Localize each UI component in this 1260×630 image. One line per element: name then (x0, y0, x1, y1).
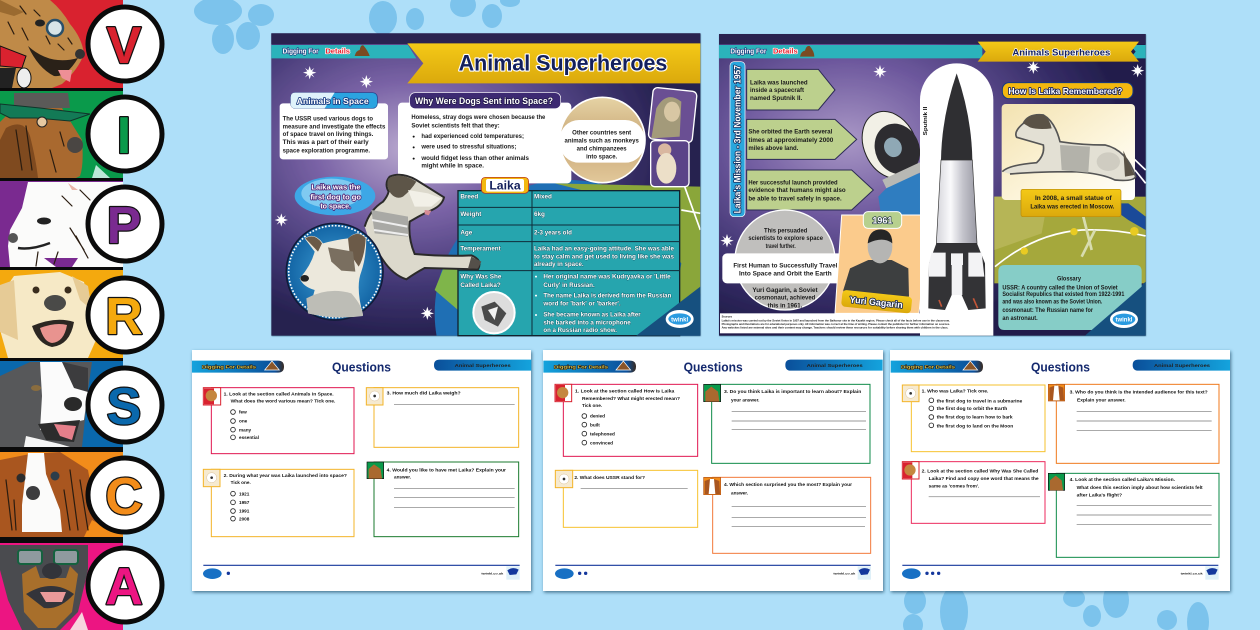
illustration: Sputnik II rocket: Sputnik II (923, 106, 929, 135)
callout: first dog in space (295, 177, 375, 215)
question 1 (902, 385, 1045, 452)
fact table: Laika: she barked into a microphone (543, 319, 631, 326)
title banner (407, 43, 700, 83)
panel: VIPERS dog strip (0, 0, 162, 630)
fact table: Laika: She became known as Laika after (543, 312, 641, 319)
question 4: 4. Look at the section called Laika's Mission. (1070, 477, 1175, 482)
worksheet header: Questions (1031, 361, 1090, 375)
small print box: Sources (722, 314, 733, 318)
header ribbon: Digging For Details: Digging For (283, 48, 319, 55)
fact table: Laika: Mixed (534, 194, 552, 201)
worksheet footer: twinkl.co.uk (833, 572, 856, 576)
glossary box (998, 265, 1142, 330)
question 2: Tick one. (231, 480, 251, 485)
question 4: 4. Which section surprised you the most? Explain your (724, 482, 852, 487)
fact table: Laika: Called Laika? (460, 282, 501, 289)
title banner (978, 42, 1139, 62)
card: Yuri Gagarin: 1961 (872, 215, 892, 225)
question 4: after Laika's flight? (1077, 492, 1122, 497)
arrow: orbited the Earth (747, 119, 857, 159)
small print box: Laika's mission was carried out by the Soviet Union in 1957 and launched from the Baikonur site in the Kazakh region. Please check all of the facts before use in the classroom. (722, 318, 950, 322)
question 1: essential (239, 435, 259, 440)
fact table: Laika: already in space. (534, 261, 584, 268)
corner triangle (1085, 282, 1146, 336)
worksheet header: Animal Superheroes (807, 363, 863, 369)
arrow: orbited the Earth: times at approximately 2000 (748, 137, 834, 144)
arrow: launched inside Sputnik II (747, 69, 835, 110)
band: I green with bloodhound (0, 91, 123, 178)
fact table: Laika: Age (460, 229, 473, 236)
question 3 (1048, 384, 1219, 463)
circle: scientists and Yuri Gagarin text: This persuaded (764, 227, 807, 234)
panel: Laika's Mission poster page 2 (719, 34, 1146, 336)
portrait medallion: Laika (286, 223, 383, 320)
text box: Why Were Dogs Sent into Space: Why Were Dogs Sent into Space? (415, 96, 553, 106)
timeline label: Laika's Mission (730, 62, 745, 217)
panel: worksheet page 3 (890, 350, 1230, 591)
letter circle S: S (107, 378, 141, 436)
question 3: 3. Do you think Laika is important to learn about? Explain (724, 389, 861, 394)
letter circle I: I (117, 107, 131, 165)
arrow: successful launch: be able to travel safely in space. (748, 195, 842, 202)
worksheet footer (203, 565, 520, 580)
letter circle R: R (105, 288, 143, 346)
callout: other countries: and chimpanzees (577, 146, 627, 153)
letter circle A (88, 548, 162, 622)
worksheet header: Animal Superheroes (455, 363, 511, 369)
question 3: 3. Who do you think is the intended audience for this text? (1070, 390, 1208, 395)
question 4 (1048, 473, 1219, 557)
text box: Animals in Space: space exploration programme. (283, 148, 370, 155)
text box: Animals in Space: The USSR used various dogs to (283, 116, 373, 123)
worksheet header (891, 360, 1230, 375)
text box: Animals in Space (280, 93, 388, 159)
text box: Why Were Dogs Sent into Space: might while in space. (421, 163, 484, 170)
text box: Why Were Dogs Sent into Space: would fidget less than other animals (420, 155, 529, 162)
fact table: Laika: 6kg (534, 211, 545, 218)
band: P purple with white dog (0, 181, 123, 267)
question 3: Explain your answer. (1077, 398, 1126, 403)
question 1: Remembered? What might erected mean? (582, 396, 680, 401)
question 2: 1957 (239, 500, 250, 505)
question 1 (203, 388, 354, 454)
heading: Laika: Laika (489, 180, 521, 193)
small print box: Photographs and illustrations are for educational purposes only. All information was correct at the time of writing. Please contact the publisher for further information on sources. (722, 322, 950, 326)
worksheet header: Questions (684, 361, 743, 375)
callout: other countries: into space. (586, 153, 617, 160)
question 1: 1. Who was Laika? Tick one. (922, 389, 988, 394)
worksheet footer (902, 565, 1219, 580)
question 2: 1921 (239, 491, 250, 496)
glossary box: cosmonaut: The Russian name for (1002, 307, 1093, 314)
question 4 (367, 462, 519, 537)
text box: Why Were Dogs Sent into Space: were used to stressful situations; (420, 144, 516, 151)
fact table: Laika: 2-3 years old (534, 229, 572, 236)
circle: scientists and Yuri Gagarin text: travel further. (766, 243, 796, 250)
question 4: answer. (731, 491, 748, 496)
circle: scientists and Yuri Gagarin text: First Human to Successfully Travel (733, 263, 838, 270)
question 2: 1991 (239, 509, 250, 514)
panel: worksheet page 2 (543, 350, 883, 591)
text box: Animals in Space: of space travel on living things. (283, 131, 374, 138)
circle: scientists and Yuri Gagarin text (722, 210, 848, 310)
small print box (720, 313, 952, 333)
circle: scientists and Yuri Gagarin text: scientists to explore space (748, 235, 823, 242)
title banner: Animals Superheroes (1012, 47, 1110, 57)
earth map and star trail (994, 157, 1146, 283)
question 2: Laika? Find and copy one word that means the (929, 476, 1039, 481)
caption: statue in Moscow: Laika was erected in Moscow. (1030, 203, 1115, 210)
glossary box: Socialist Republics that existed from 1922-1991 (1002, 291, 1125, 298)
header ribbon: Digging For Details: Details (325, 48, 350, 55)
header ribbon: Digging For Details (271, 45, 416, 58)
question 1: What does the word various mean? Tick one. (231, 399, 335, 404)
glossary box: Glossary (1057, 276, 1081, 283)
question 1: denied (590, 414, 605, 419)
arrow: launched inside Sputnik II: named Sputnik II. (750, 95, 803, 102)
worksheet header: Digging For Details (901, 364, 955, 370)
band: S blue with collie (0, 361, 123, 447)
circle: scientists and Yuri Gagarin text: Yuri Gagarin, a Soviet (752, 287, 819, 294)
monkey photos (648, 87, 697, 187)
text box: Why Were Dogs Sent into Space: Homeless, stray dogs were chosen because the (411, 114, 546, 121)
question 1: built (590, 422, 600, 427)
worksheet header: Digging For Details (202, 364, 256, 370)
band: A pink with rottweiler (0, 543, 123, 630)
fact table: Laika: Laika had an easy-going attitude. She was able (534, 246, 674, 253)
worksheet header (543, 360, 883, 375)
fact table: Laika: Breed (460, 194, 478, 201)
glossary box: and was also known as the Soviet Union. (1002, 299, 1103, 306)
question 3: 3. How much did Laika weigh? (387, 391, 461, 396)
question 1: 1. Look at the section called Animals in Space. (224, 391, 334, 396)
question 2: same as 'comes from'. (929, 483, 979, 488)
band: C orange with spaniel (0, 452, 123, 537)
panel: Animal Superheroes poster page 1 (270, 33, 702, 337)
illustration: Laika in harness (365, 175, 481, 279)
arrow: successful launch: evidence that humans might also (748, 187, 846, 194)
question 2: 2008 (239, 516, 250, 521)
question 1 (555, 384, 698, 456)
text box: Animals in Space: measure and investigate the effects (283, 124, 386, 131)
title banner: Animal Superheroes (459, 51, 667, 76)
text box: Why Were Dogs Sent into Space: Soviet scientists felt that they: (411, 122, 500, 129)
circle: scientists and Yuri Gagarin text: Into Space and Orbit the Earth (739, 271, 832, 278)
callout: first dog in space: Laika was the (311, 182, 361, 191)
letter circle P (88, 187, 162, 261)
fact table: Laika: on a Russian radio show. (543, 327, 617, 334)
fact table: Laika: Curly' in Russian. (543, 282, 595, 289)
worksheet footer: twinkl.co.uk (481, 572, 504, 576)
text box: Why Were Dogs Sent into Space: had experienced cold temperatures; (421, 133, 524, 140)
letter circle S (88, 368, 162, 442)
bottom-right corner and twinkl logo: twinkl (671, 317, 688, 323)
heading: Laika (481, 177, 529, 193)
letter circle P: P (107, 197, 141, 255)
fact table: Laika: Weight (460, 211, 482, 218)
callout: first dog in space: to space. (320, 201, 351, 210)
question 1: convinced (590, 440, 613, 445)
card: Yuri Gagarin (835, 212, 928, 314)
question 2: 2. What does USSR stand for? (574, 475, 645, 480)
letter circle V (88, 7, 162, 81)
illustration: Sputnik II rocket (920, 63, 993, 336)
question 3 (366, 388, 519, 447)
band: R yellow with retriever (0, 270, 123, 358)
arrow: launched inside Sputnik II: Laika was launched (750, 79, 808, 86)
heading: How Is Laika Remembered (1002, 83, 1133, 99)
band: V red with terrier (0, 0, 123, 88)
question 1: many (239, 427, 252, 432)
question 1: one (239, 419, 248, 424)
question 2: 2. Look at the section called Why Was She Called (922, 468, 1038, 473)
question 2 (203, 469, 354, 537)
letter circle C: C (105, 468, 143, 526)
arrow: orbited the Earth: She orbited the Earth several (748, 129, 833, 136)
question 3 (704, 384, 870, 463)
worksheet footer: twinkl.co.uk (1181, 572, 1203, 576)
glossary box: USSR: A country called the Union of Soviet (1002, 284, 1118, 291)
panel: worksheet page 1 (192, 350, 531, 591)
circle: scientists and Yuri Gagarin text: this in 1961. (768, 303, 803, 310)
fact table: Laika: Why Was She (460, 273, 502, 280)
letter circle V: V (107, 17, 142, 75)
letter circle R (88, 278, 162, 352)
letter circle I (88, 97, 162, 171)
callout: other countries: animals such as monkeys (564, 138, 639, 145)
arrow: launched inside Sputnik II: inside a spacecraft (750, 87, 805, 94)
heading: How Is Laika Remembered: How Is Laika Remembered? (1008, 86, 1122, 96)
text box: Animals in Space: Animals in Space (297, 96, 369, 106)
callout: other countries: Other countries sent (572, 129, 632, 136)
earth (434, 180, 700, 336)
question 1: telephoned (590, 431, 615, 436)
arrow: successful launch (747, 170, 873, 210)
fact table: Laika: to stay calm and get used to living like she was (534, 253, 674, 260)
worksheet header: Digging For Details (554, 364, 608, 370)
question 4: answer. (394, 474, 411, 479)
callout: other countries (560, 97, 645, 183)
bottom-right corner and twinkl logo (636, 287, 700, 336)
question 1: the first dog to land on the Moon (937, 423, 1013, 428)
earth (878, 173, 922, 220)
question 4: 4. Would you like to have met Laika? Explain your (387, 468, 506, 473)
text box: Why Were Dogs Sent into Space (398, 93, 571, 183)
glossary box: an astronaut. (1002, 315, 1038, 322)
twinkl logo (1110, 311, 1138, 328)
header ribbon: Details (773, 48, 798, 55)
fact table: Laika: The name Laika is derived from the Russian (543, 292, 671, 299)
question 2 (902, 462, 1045, 523)
fact table: Laika: word for 'bark' or 'barker'. (542, 301, 621, 308)
text box: Animals in Space: This was a part of their early (283, 139, 369, 146)
question 4: What does this section imply about how scientists felt (1077, 485, 1203, 490)
letter circle A: A (105, 558, 143, 616)
fact table: Laika: Temperament (460, 246, 502, 253)
caption: statue in Moscow (1021, 189, 1121, 217)
letter circle C (88, 458, 162, 532)
question 1: the first dog to travel in a submarine (937, 398, 1023, 403)
question 1: the first dog to orbit the Earth (937, 406, 1007, 411)
question 2 (555, 470, 698, 527)
header ribbon (719, 45, 1146, 58)
question 2: 2. During what year was Laika launched into space? (224, 473, 347, 478)
fact table: Laika (458, 191, 680, 336)
question 1: few (239, 410, 247, 415)
question 1: the first dog to learn how to bark (937, 415, 1013, 420)
twinkl logo: twinkl (1116, 318, 1133, 324)
small print box: Any websites listed are external sites and their content may change. Teachers should review these resources for suitability before sharing them with children in the class. (722, 326, 949, 330)
worksheet header: Questions (332, 361, 391, 375)
worksheet header (192, 360, 531, 375)
timeline label: Laika's Mission: Laika's Mission - 3rd November 1957 (732, 65, 742, 213)
worksheet footer (555, 565, 871, 580)
arrow: orbited the Earth: miles above land. (748, 145, 799, 152)
arrow: successful launch: Her successful launch provided (748, 179, 838, 186)
caption: statue in Moscow: In 2008, a small statue of (1035, 195, 1113, 202)
header ribbon: Digging For (730, 48, 767, 55)
question 1: 1. Look at the section called How Is Laika (575, 389, 675, 394)
illustration: space helmet (852, 102, 930, 190)
worksheet header: Animal Superheroes (1154, 363, 1210, 369)
photo panel: Laika statue (1002, 104, 1136, 200)
question 4 (704, 477, 871, 553)
circle: scientists and Yuri Gagarin text: cosmonaut, achieved (755, 295, 815, 302)
question 1: Tick one. (582, 403, 602, 408)
card: Yuri Gagarin: Yuri Gagarin (849, 295, 903, 310)
question 3: your answer. (731, 398, 759, 403)
callout: first dog in space: first dog to go (310, 192, 361, 201)
fact table: Laika: Her original name was Kudryavka or 'Little (543, 273, 671, 280)
